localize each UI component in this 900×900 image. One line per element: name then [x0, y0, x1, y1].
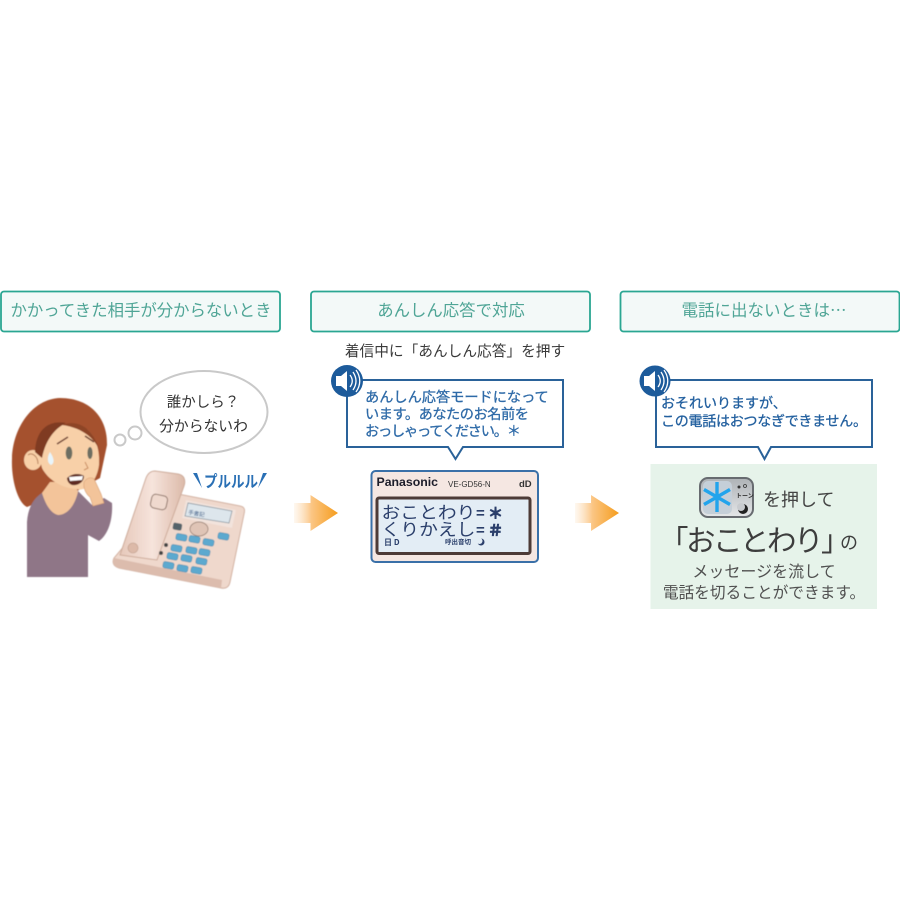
- phone display panel: くりかえし: [382, 517, 475, 541]
- panel: decline instructions: の: [840, 529, 858, 555]
- phone display panel: 呼出音切: [445, 536, 472, 546]
- illustration: worried woman: [12, 398, 112, 577]
- ringing sound label: プルルル: [204, 468, 258, 492]
- icon: speaker: [331, 365, 363, 397]
- heading: caller unknown: かかってきた相手が分からないとき: [11, 297, 271, 321]
- phone display panel: ＊: [488, 502, 503, 524]
- callout: decline message: この電話はおつなぎできません。: [661, 411, 867, 431]
- thought bubble: [114, 371, 268, 453]
- heading: anshin response: あんしん応答で対応: [377, 297, 525, 321]
- arrow 2: [575, 495, 619, 531]
- icon: asterisk key: [700, 478, 754, 517]
- phone display panel: おことわり: [382, 500, 475, 524]
- panel: decline instructions: 「おことわり」: [659, 518, 848, 560]
- phone display panel: VE-GD56-N: [448, 480, 491, 489]
- heading: caller unknown: [1, 292, 280, 332]
- callout: anshin mode message: [331, 365, 563, 459]
- panel: decline instructions: メッセージを流して: [692, 558, 836, 582]
- callout: decline message: [640, 366, 872, 459]
- callout: anshin mode message: あんしん応答モードになって: [365, 387, 549, 407]
- thought bubble: 誰かしら？: [167, 391, 239, 412]
- panel: decline instructions: [650, 464, 877, 609]
- phone display panel: dD: [519, 479, 532, 490]
- heading: not answering: [620, 292, 900, 332]
- panel: decline instructions: 電話を切ることができます。: [663, 580, 865, 603]
- heading: not answering: 電話に出ないときは…: [682, 297, 846, 321]
- heading: anshin response: [311, 292, 590, 332]
- phone display panel: 日 D: [384, 537, 400, 548]
- phone display panel: Panasonic: [376, 475, 438, 489]
- thought bubble: 分からないわ: [159, 415, 248, 436]
- phone display panel: =: [476, 505, 485, 522]
- icon: speaker: [640, 366, 670, 396]
- illustration: telephone: 手書記: [188, 508, 206, 519]
- phone display panel: ＃: [488, 520, 503, 540]
- icon: asterisk key: トーン: [736, 491, 754, 500]
- arrow 1: [294, 495, 338, 531]
- instruction text: 着信中に「あんしん応答」を押す: [345, 340, 565, 361]
- callout: anshin mode message: います。あなたのお名前を: [365, 404, 529, 424]
- panel: decline instructions: を押して: [763, 486, 834, 512]
- phone display panel: =: [476, 522, 485, 539]
- illustration: telephone: [113, 471, 245, 588]
- phone display panel: [372, 471, 538, 562]
- callout: anshin mode message: おっしゃってください。＊: [365, 421, 521, 441]
- callout: decline message: おそれいりますが、: [661, 393, 787, 413]
